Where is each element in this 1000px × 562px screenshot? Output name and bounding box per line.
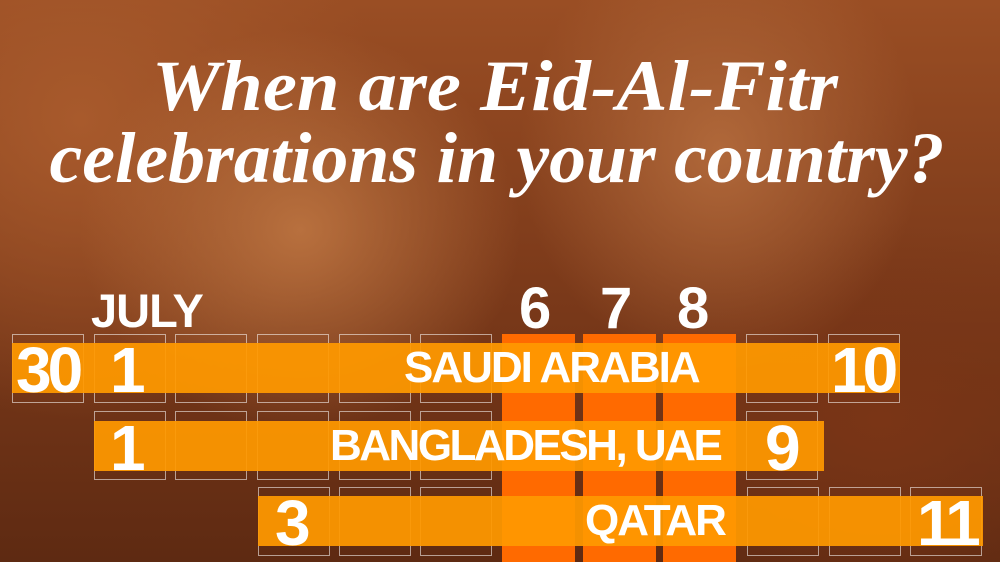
bar: Bangladesh, UAE: 9 <box>765 412 797 484</box>
bar: Bangladesh, UAE <box>94 421 824 471</box>
bar: Saudi Arabia <box>12 343 900 393</box>
bar: Saudi Arabia: 1 <box>110 334 142 406</box>
day headers: 7 <box>600 276 632 341</box>
day headers: 8 <box>677 276 709 341</box>
bar: Qatar: 11 <box>917 487 977 559</box>
bar: Qatar: QATAR <box>585 496 725 545</box>
bar: Bangladesh, UAE: BANGLADESH, UAE <box>330 421 720 470</box>
bar: Saudi Arabia: 30 <box>16 334 79 406</box>
title: celebrations in your country? <box>50 118 945 198</box>
bar: Saudi Arabia: SAUDI ARABIA <box>404 343 699 392</box>
bar: Qatar: 3 <box>275 487 307 559</box>
title <box>50 46 945 198</box>
bar: Qatar <box>258 496 983 546</box>
bar: Bangladesh, UAE: 1 <box>110 412 142 484</box>
title: When are Eid-Al-Fitr <box>152 46 839 126</box>
day headers: 6 <box>519 276 551 341</box>
day headers <box>519 276 709 341</box>
bar: Saudi Arabia: 10 <box>831 334 894 406</box>
month label: JULY <box>91 284 203 337</box>
